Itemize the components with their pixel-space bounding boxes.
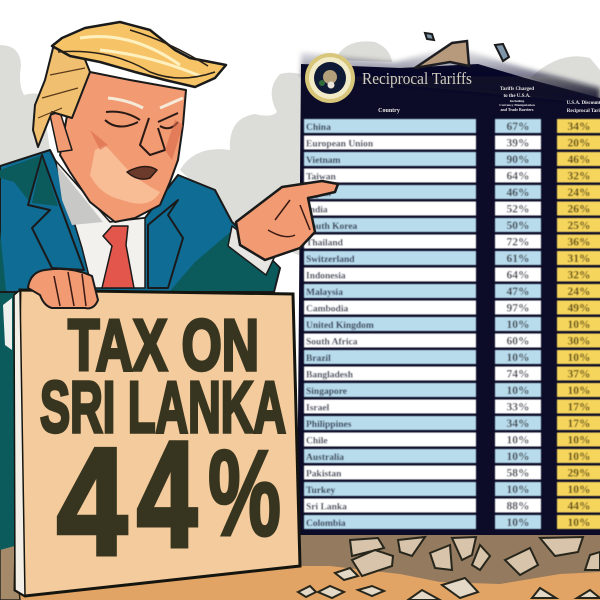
sign line: percent: % — [208, 425, 281, 561]
icon: ruined building — [415, 41, 469, 68]
row: Bangladesh — [304, 366, 600, 380]
column heading: tariffs charged: Including — [510, 99, 524, 103]
row: Malaysia: Malaysia — [306, 288, 343, 298]
row: Thailand — [304, 234, 600, 248]
row: Pakistan — [304, 466, 600, 480]
sign line: TAX ON: TAX ON — [68, 306, 259, 386]
white shirt patch left of sign — [3, 298, 12, 350]
hair strand lines — [58, 30, 215, 78]
mouth — [127, 166, 157, 179]
row: Cambodia: Cambodia — [306, 304, 348, 314]
column heading: discounted reciprocal tariffs — [567, 101, 600, 114]
row: Israel — [304, 400, 600, 414]
column heading: tariffs charged — [499, 87, 535, 112]
row: Australia: Australia — [306, 453, 344, 463]
row: Sri Lanka: 44% — [568, 500, 590, 512]
row: Philippines: 34% — [506, 418, 530, 430]
suit shaded areas — [0, 155, 279, 291]
shirt cuff — [228, 226, 274, 275]
side hair strands — [38, 68, 85, 118]
nose — [140, 118, 165, 155]
pointing hand — [236, 181, 338, 260]
row: Chile: Chile — [306, 436, 328, 446]
row: Singapore: Singapore — [306, 387, 347, 397]
row: Turkey — [304, 482, 600, 496]
hair — [52, 22, 226, 87]
row: India — [304, 202, 600, 216]
row: Malaysia — [304, 284, 600, 298]
reciprocal tariffs table panel — [297, 33, 600, 535]
ground — [0, 565, 600, 600]
row: China: 34% — [568, 121, 590, 133]
row: Thailand: Thailand — [306, 238, 344, 248]
row: Switzerland — [304, 251, 600, 265]
row: Thailand: 36% — [568, 236, 590, 248]
row: China: China — [306, 123, 331, 133]
row: Taiwan: Taiwan — [306, 172, 336, 182]
row: Japan: Japan — [306, 189, 332, 199]
row: Taiwan — [304, 168, 600, 182]
panel top shading — [301, 46, 600, 104]
row: Cambodia: 97% — [506, 302, 530, 314]
sign line: SRI LANKA: SRI LANKA — [40, 368, 286, 448]
tie — [102, 226, 134, 288]
brow highlights — [108, 98, 183, 108]
row: Colombia — [304, 515, 600, 529]
row: Colombia: 10% — [506, 517, 530, 529]
column heading: tariffs charged: Currency Manipulation — [499, 103, 535, 107]
row: United Kingdom: United Kingdom — [306, 321, 374, 331]
row: European Union: 20% — [568, 138, 590, 150]
row: Pakistan: Pakistan — [306, 470, 342, 480]
row: Israel: 17% — [568, 402, 590, 414]
row: Vietnam — [304, 152, 600, 166]
row: Sri Lanka: 88% — [506, 500, 530, 512]
panel background — [297, 64, 600, 535]
row: Indonesia — [304, 268, 600, 282]
row: India: 26% — [568, 204, 590, 216]
cheek shading — [90, 120, 183, 160]
row: United Kingdom — [304, 317, 600, 331]
ear — [50, 112, 72, 152]
presidential seal — [305, 53, 355, 103]
row: Australia — [304, 449, 600, 463]
row: South Korea: South Korea — [306, 222, 358, 232]
row: Indonesia: 64% — [506, 270, 530, 282]
jacket left lapel dark edge — [32, 157, 58, 206]
row: Philippines: 17% — [568, 418, 590, 430]
sign board — [15, 290, 300, 596]
row: Colombia: 10% — [568, 517, 590, 529]
row: India: India — [306, 206, 328, 216]
figure: angry man in blue suit — [0, 22, 338, 550]
row: Japan: 24% — [568, 187, 590, 199]
row: South Korea: 25% — [568, 220, 590, 232]
suit — [0, 150, 280, 292]
row: Singapore — [304, 383, 600, 397]
panel title: Reciprocal Tariffs — [362, 69, 472, 88]
row: European Union: European Union — [306, 140, 374, 150]
row: Singapore: 10% — [506, 385, 530, 397]
face highlight — [90, 145, 160, 204]
column heading: tariffs charged: Tariffs Charged — [500, 87, 534, 92]
side hair — [33, 44, 90, 147]
hair streaks — [80, 37, 200, 76]
row: South Africa: 60% — [506, 336, 530, 348]
row: Brazil: Brazil — [306, 354, 331, 364]
row: Australia: 10% — [506, 451, 530, 463]
row: Turkey: 10% — [506, 484, 530, 496]
row: Switzerland: Switzerland — [306, 255, 355, 265]
row: United Kingdom: 10% — [568, 319, 590, 331]
row: Switzerland: 31% — [568, 253, 590, 265]
row: Cambodia — [304, 300, 600, 314]
row: Cambodia: 49% — [568, 302, 590, 314]
row: Sri Lanka: Sri Lanka — [306, 502, 347, 512]
column heading: tariffs charged: to the U.S.A. — [503, 94, 531, 99]
row: Israel: Israel — [306, 404, 330, 414]
shirt and collar — [55, 160, 145, 288]
row: Bangladesh: 37% — [568, 368, 590, 380]
row: Malaysia: 47% — [506, 286, 530, 298]
row: European Union — [304, 136, 600, 150]
row: India: 52% — [506, 204, 530, 216]
background smoke clouds — [0, 41, 600, 260]
head and face — [60, 72, 186, 222]
row: Japan: 46% — [506, 187, 530, 199]
row: Indonesia: Indonesia — [306, 272, 346, 282]
sign line: second 4: 4 — [137, 410, 197, 578]
row: Australia: 10% — [568, 451, 590, 463]
row: Turkey: 10% — [568, 484, 590, 496]
eyes and brows — [105, 112, 178, 128]
row: Brazil — [304, 350, 600, 364]
row: Chile: 10% — [568, 434, 590, 446]
row: Malaysia: 24% — [568, 286, 590, 298]
jacket right lapel — [148, 200, 183, 288]
finger separators — [54, 272, 86, 306]
row: Philippines — [304, 416, 600, 430]
row: Vietnam: 46% — [568, 154, 590, 166]
row: China: 67% — [506, 121, 530, 133]
rubble band — [298, 535, 600, 600]
row: Taiwan: 64% — [506, 170, 530, 182]
row: Philippines: Philippines — [306, 420, 352, 430]
hand gripping sign — [28, 269, 98, 308]
row: Israel: 33% — [506, 402, 530, 414]
sign edge — [14, 290, 25, 596]
row: European Union: 39% — [506, 138, 530, 150]
row: Chile — [304, 432, 600, 446]
jacket left lapel — [28, 155, 84, 270]
row: Pakistan: 29% — [568, 468, 590, 480]
finger lines — [268, 200, 310, 237]
row: Vietnam: Vietnam — [306, 156, 341, 166]
table rows — [304, 119, 600, 529]
row: United Kingdom: 10% — [506, 319, 530, 331]
row: Taiwan: 32% — [568, 170, 590, 182]
rubble left of sign — [0, 540, 20, 600]
column heading: tariffs charged: and Trade Barriers — [501, 107, 534, 112]
protest sign — [14, 290, 300, 596]
collar shadow — [57, 165, 103, 225]
row: Vietnam: 90% — [506, 154, 530, 166]
row: South Africa: South Africa — [306, 338, 358, 348]
row: Bangladesh: Bangladesh — [306, 370, 354, 380]
row: South Africa: 30% — [568, 336, 590, 348]
row: Turkey: Turkey — [306, 486, 335, 496]
row: Chile: 10% — [506, 434, 530, 446]
row: Japan — [304, 185, 600, 199]
sign line: first 4: 4 — [57, 417, 127, 587]
row: Brazil: 10% — [506, 352, 530, 364]
row: Indonesia: 32% — [568, 270, 590, 282]
row: South Korea — [304, 218, 600, 232]
hand shape — [28, 269, 98, 308]
icon: debris shards — [425, 33, 509, 61]
row: Thailand: 72% — [506, 236, 530, 248]
row: Singapore: 10% — [568, 385, 590, 397]
row: Bangladesh: 74% — [506, 368, 530, 380]
row: Colombia: Colombia — [306, 519, 346, 529]
row: South Africa — [304, 334, 600, 348]
row: Pakistan: 58% — [506, 468, 530, 480]
row: China — [304, 119, 600, 133]
column heading: country: Country — [378, 108, 400, 114]
row: Switzerland: 61% — [506, 253, 530, 265]
row: Sri Lanka — [304, 498, 600, 512]
row: South Korea: 50% — [506, 220, 530, 232]
row: Brazil: 10% — [568, 352, 590, 364]
lower torso left of sign — [0, 290, 18, 550]
